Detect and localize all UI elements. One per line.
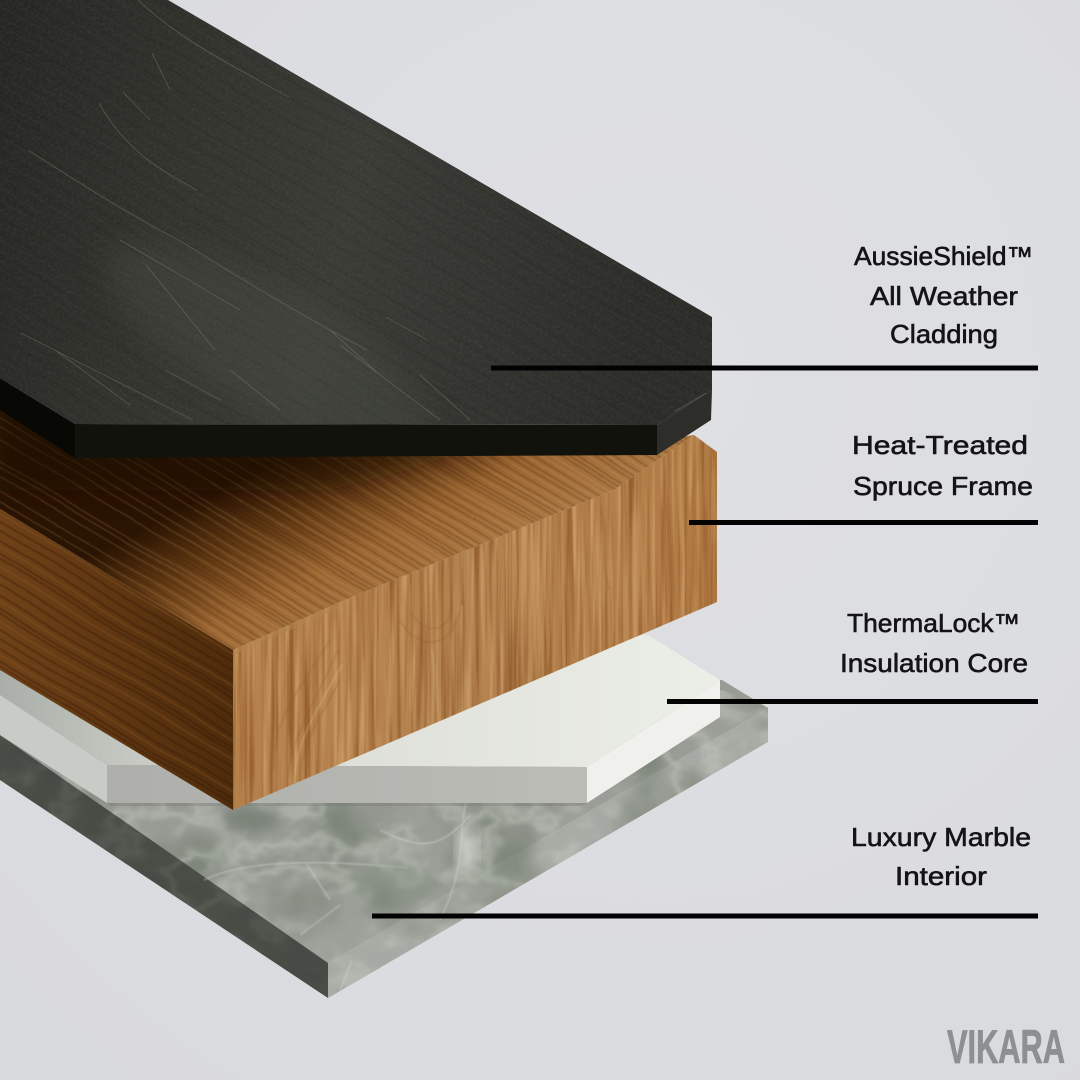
label: Heat-Treated Spruce Frame: Heat-Treated (852, 430, 1028, 460)
cladding grain (0, 0, 712, 424)
layer: spruce frame block (0, 410, 717, 810)
wood left face (0, 509, 233, 810)
label: Luxury Marble Interior: Luxury Marble (851, 822, 1031, 852)
label: Luxury Marble Interior: Interior (895, 861, 987, 891)
label: Heat-Treated Spruce Frame (852, 430, 1033, 501)
wood top face (0, 410, 694, 650)
label: ThermaLock Insulation Core: ThermaLock™ (847, 608, 1020, 638)
layer: marble interior slab (0, 680, 780, 1010)
leader lines (372, 366, 1038, 918)
layer: cladding panel (0, 0, 712, 458)
label: AussieShield All Weather Cladding: Cladding (890, 319, 998, 349)
layer: insulation core (0, 635, 720, 806)
label: Luxury Marble Interior (851, 822, 1031, 891)
label: Heat-Treated Spruce Frame: Spruce Frame (853, 471, 1033, 501)
label: ThermaLock Insulation Core (840, 608, 1028, 678)
label: AussieShield All Weather Cladding (854, 241, 1033, 349)
wood front face (225, 425, 725, 815)
label: AussieShield All Weather Cladding: All Weather (870, 281, 1018, 311)
label: ThermaLock Insulation Core: Insulation Core (840, 648, 1028, 678)
label: AussieShield All Weather Cladding: AussieShield™ (854, 241, 1033, 271)
